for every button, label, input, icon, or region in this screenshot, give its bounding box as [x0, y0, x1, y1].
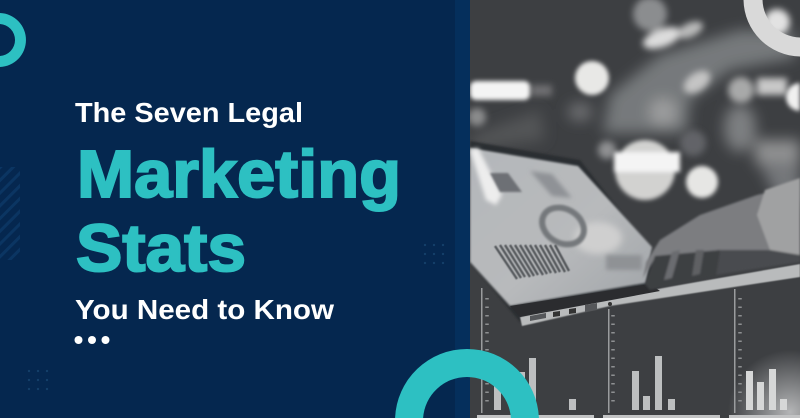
- title: line one: The Seven Legal: [75, 97, 303, 128]
- chart base labels: [477, 415, 800, 418]
- icon: top-right pale ring: [744, 0, 800, 56]
- photo: blurred bokeh lights: [468, 0, 790, 159]
- panel: lighter navy strip: [455, 0, 470, 418]
- icon: top-left teal ring: [0, 13, 26, 67]
- decoration: dot grid bottom: [22, 368, 52, 395]
- title: Stats: Stats: [76, 211, 246, 286]
- decoration: hatch pattern: [0, 167, 20, 260]
- photo: hand and sleeve: [643, 178, 800, 290]
- screen: blurred figures: [606, 255, 642, 270]
- photo: tablet screen: [470, 148, 652, 306]
- screen: donut chart: [538, 204, 588, 248]
- photo: dark laptop bezel: [470, 141, 660, 322]
- panel: photo of laptop with charts: [468, 0, 800, 418]
- chart group 1: [481, 288, 576, 413]
- photo: soft background bands: [472, 30, 800, 205]
- screen: small chart block: [490, 173, 522, 192]
- chart group 3: [734, 289, 787, 413]
- decoration: dot grid right: [421, 239, 448, 266]
- photo: laptop base with ports: [510, 264, 800, 326]
- icon: bottom teal ring: [395, 349, 539, 418]
- screen: text lines: [530, 171, 572, 198]
- panel: navy background: [0, 0, 470, 418]
- glow behind chart group 3: [732, 354, 800, 415]
- title: line four: You Need to Know: [75, 294, 334, 325]
- title: Marketing: Marketing: [77, 137, 401, 212]
- chart group 2: [608, 309, 675, 413]
- screen: striped bar chart: [495, 245, 569, 279]
- icon: three dots: [74, 336, 110, 344]
